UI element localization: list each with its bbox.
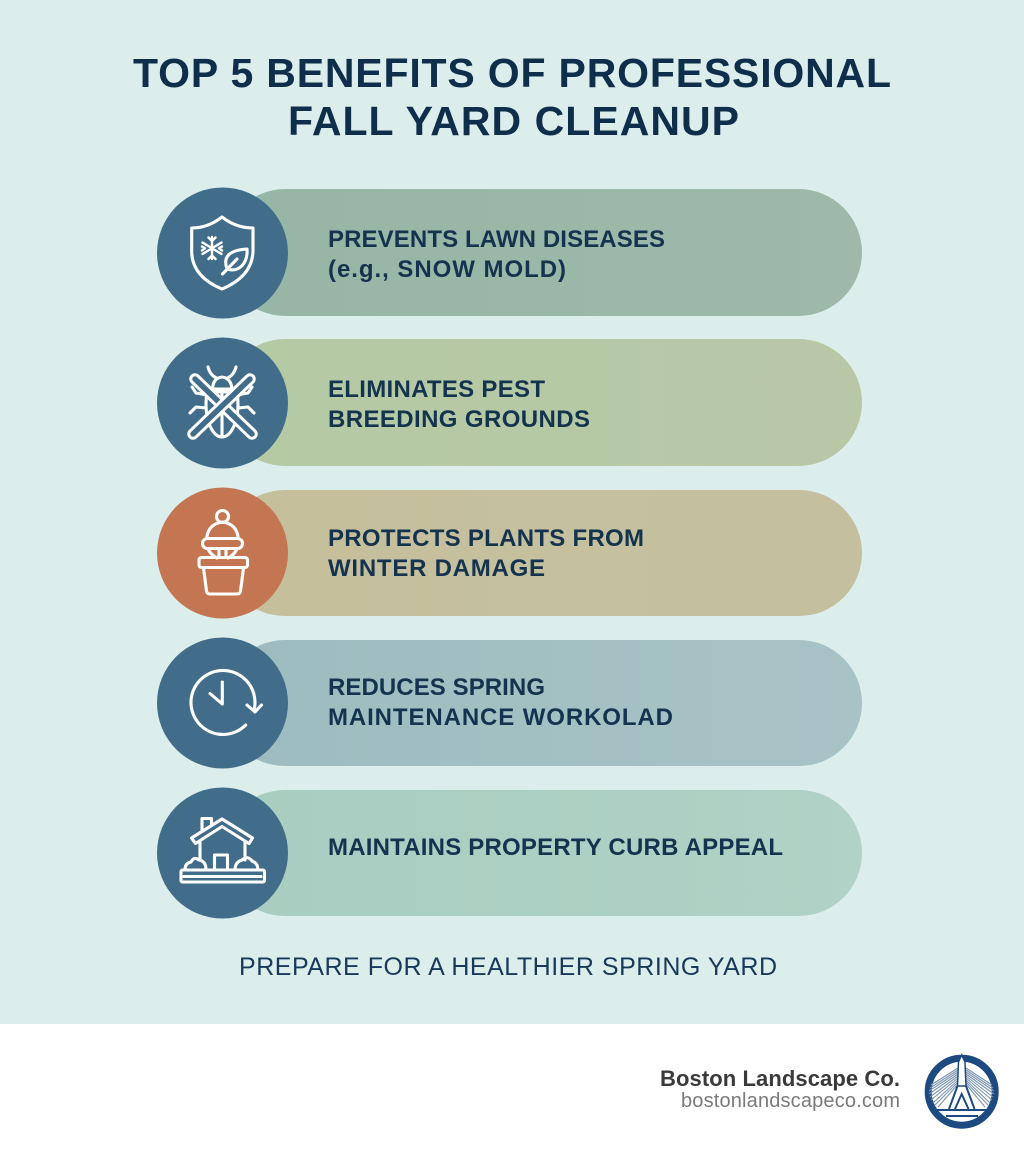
title: FALL YARD CLEANUP bbox=[288, 98, 739, 144]
footer panel bbox=[0, 1024, 1024, 1154]
title bbox=[133, 50, 891, 144]
icon: shield with snowflake and leaf bbox=[192, 217, 253, 289]
benefit 3 text bbox=[328, 525, 644, 582]
panel: benefit 4 reduces workload bbox=[157, 638, 862, 768]
website: bostonlandscapeco.com bbox=[681, 1090, 900, 1112]
circle 5 bbox=[157, 788, 288, 918]
benefit 4 text: MAINTENANCE WORKOLAD bbox=[328, 704, 673, 731]
pill 1 bbox=[222, 189, 862, 316]
pill 2 bbox=[222, 339, 862, 466]
pill 5 bbox=[222, 790, 862, 916]
icon: covered plant in a pot bbox=[199, 510, 248, 594]
benefit 2 text bbox=[328, 376, 590, 433]
panel: benefit 5 curb appeal bbox=[157, 788, 862, 918]
circle 4 bbox=[157, 638, 288, 768]
panel: benefit 2 eliminates pests bbox=[157, 338, 862, 468]
title: TOP 5 BENEFITS OF PROFESSIONAL bbox=[133, 50, 891, 96]
pill 3 bbox=[222, 490, 862, 616]
benefit 1 text: PREVENTS LAWN DISEASES bbox=[328, 226, 665, 253]
panel: benefit 3 protects plants bbox=[157, 488, 862, 618]
benefit 1 text bbox=[328, 226, 665, 283]
company name: Boston Landscape Co. bbox=[660, 1066, 900, 1091]
circle 3 bbox=[157, 488, 288, 618]
benefit 1 text: (e.g., SNOW MOLD) bbox=[328, 256, 566, 283]
panel: benefit 1 prevents lawn diseases bbox=[157, 188, 862, 318]
icon: crossed-out bug bbox=[190, 367, 254, 437]
benefit 4 text: REDUCES SPRING bbox=[328, 674, 545, 701]
benefit 5 text: MAINTAINS PROPERTY CURB APPEAL bbox=[328, 834, 783, 861]
benefit 3 text: PROTECTS PLANTS FROM bbox=[328, 525, 644, 552]
logo: bridge emblem bbox=[928, 1055, 995, 1125]
benefit 2 text: BREEDING GROUNDS bbox=[328, 406, 590, 433]
tagline: PREPARE FOR A HEALTHIER SPRING YARD bbox=[239, 953, 777, 981]
benefit 3 text: WINTER DAMAGE bbox=[328, 555, 545, 582]
circle 1 bbox=[157, 188, 288, 318]
pill 4 bbox=[222, 640, 862, 766]
icon: clock with arrow bbox=[191, 670, 262, 734]
benefit 2 text: ELIMINATES PEST bbox=[328, 376, 545, 403]
circle 2 bbox=[157, 338, 288, 468]
icon: house with bushes bbox=[181, 818, 264, 882]
benefit 4 text bbox=[328, 674, 673, 731]
